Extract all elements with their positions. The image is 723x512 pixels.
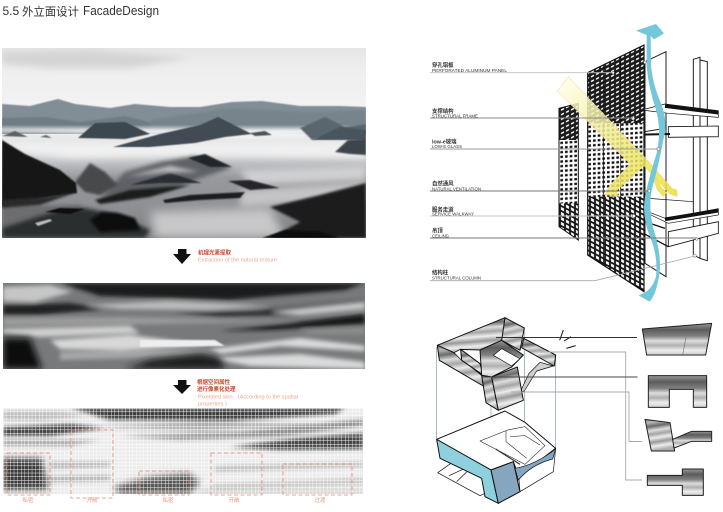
caption: natural texture (198, 248, 277, 264)
caption: pixelated skin: Pixelated skin （According to the spatial (198, 394, 298, 400)
component labels: STRUCTURAL FRAME (432, 113, 478, 118)
arrow: down 2 (173, 380, 191, 394)
roof: opening void (454, 349, 462, 360)
upper roof volume (437, 318, 556, 410)
component labels: 服务走道 (432, 206, 454, 214)
dashed zones (7, 430, 352, 498)
zone labels (22, 496, 326, 504)
perforated panel small (559, 103, 578, 240)
piece: u-shaped panel (648, 376, 707, 407)
title: 外立面设计 (22, 4, 79, 18)
title: 5.5 (2, 4, 20, 18)
exploded axonometric (437, 318, 576, 503)
airflow ribbon (636, 24, 665, 302)
title (2, 4, 159, 18)
component labels: 穿孔铝板 (432, 61, 454, 69)
caption: pixelated skin: properties ） (198, 400, 231, 408)
component labels: SERVICE WALKWAY (432, 212, 474, 216)
component labels: 自然通风 (432, 180, 454, 188)
zone labels: 开敞 (228, 496, 240, 504)
caption: natural texture: 机理光素提取 (198, 248, 232, 256)
lower volume (437, 411, 556, 503)
roof: left wing top (437, 318, 505, 353)
extracted facade pieces (642, 323, 712, 495)
component labels: STRUCTURAL COLUMN (432, 276, 481, 280)
back glass frame (624, 52, 707, 277)
facade section diagram (557, 24, 718, 302)
roof: left wing face (437, 345, 483, 386)
pixelated facade strip (3, 408, 363, 494)
piece: angled panel (645, 419, 712, 451)
sunlight arrow (557, 77, 677, 197)
texture strip (3, 283, 365, 369)
highlight marks (560, 330, 576, 348)
roof: courtyard void (493, 349, 520, 366)
zone labels: 开敞 (86, 496, 98, 504)
component labels (432, 61, 508, 280)
photo: misty mountains (0, 48, 366, 238)
zone labels: 过渡 (314, 496, 326, 504)
component labels: 支撑结构 (432, 107, 454, 115)
floor slabs (625, 104, 718, 247)
component labels: 吊顶 (432, 228, 443, 234)
title: FacadeDesign (83, 4, 159, 18)
roof: strut (520, 362, 553, 392)
axonometric leader lines (482, 338, 642, 480)
caption: pixelated skin: 根据空间属性 (197, 378, 231, 386)
piece: t-shaped panel (647, 469, 703, 495)
component labels: CEILING (432, 233, 449, 238)
roof: front block (482, 367, 523, 410)
piece: top panel (642, 323, 712, 355)
zone labels: 私密 (22, 496, 34, 504)
component labels: LOW-E GLASS (432, 144, 462, 149)
roof: inner fin (461, 349, 483, 375)
zone labels: 私密 (162, 496, 174, 504)
caption: pixelated skin: 进行像素化处理 (197, 385, 236, 393)
caption: natural texture: Extraction of the natural texture (198, 258, 277, 264)
roof: back face (502, 318, 524, 350)
arrow: down 1 (173, 249, 191, 264)
component labels: NATURAL VENTILATION (432, 186, 481, 191)
component labels: low-e玻璃 (432, 138, 457, 146)
leader lines (430, 73, 697, 281)
anchor dots (612, 61, 698, 257)
perforated panel large (588, 45, 644, 293)
caption: pixelated skin (197, 378, 298, 408)
component labels: 结构柱 (432, 268, 449, 276)
roof: right wing (522, 338, 556, 366)
guide columns (437, 330, 556, 470)
component labels: PERFORATED ALUMINUM PANEL (432, 68, 508, 73)
roof: courtyard ring (480, 340, 523, 377)
